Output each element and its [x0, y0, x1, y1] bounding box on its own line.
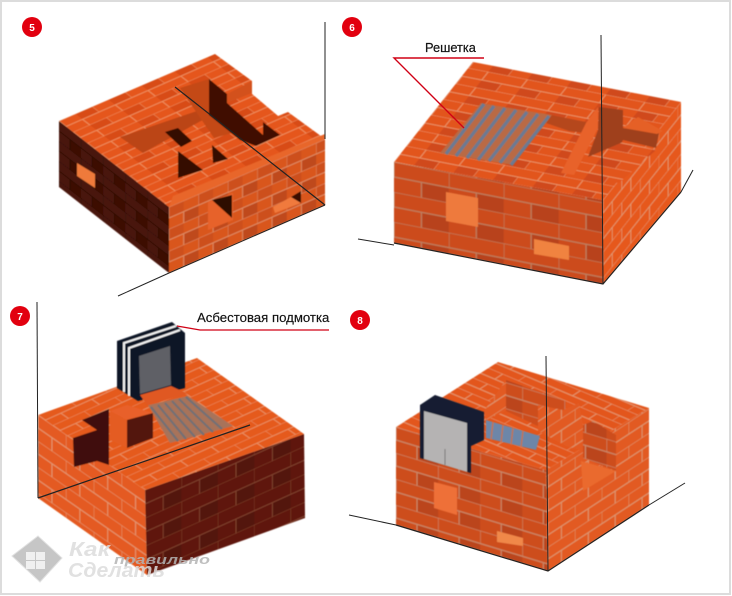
axis lines 6 [358, 35, 693, 284]
step badge 5: 5 [29, 23, 35, 34]
step badge 7: 7 [17, 312, 23, 323]
brick body 5 [59, 54, 325, 273]
watermark text [68, 539, 210, 582]
diagram 6: grate layer [342, 17, 693, 284]
step badge 7 [10, 306, 30, 326]
callout: asbestos wrap: Асбестовая подмотка [197, 310, 330, 325]
diagram 8: door closed layer [349, 310, 685, 571]
callout: asbestos wrap [177, 310, 330, 330]
axis lines 5 [118, 22, 325, 296]
watermark text: Сделать [68, 560, 165, 582]
watermark text: Как [69, 539, 111, 561]
step badge 6 [342, 17, 362, 37]
diagram 5: brick stove layer [22, 17, 325, 296]
step badge 8 [350, 310, 370, 330]
firebox door 8 [420, 395, 484, 473]
icon: house diamond [12, 536, 62, 582]
grate 7 [151, 397, 222, 441]
firebox door with asbestos wrap 7 [117, 322, 188, 405]
callout: grate [394, 40, 484, 128]
watermark logo [12, 536, 210, 582]
callout: grate: Решетка [425, 40, 477, 55]
grate 6 [440, 103, 552, 165]
watermark text: правильно [114, 552, 210, 567]
axis lines 7 [37, 302, 250, 498]
brick body 8 [396, 362, 649, 571]
step badge 6: 6 [349, 23, 355, 34]
brick body 7 [38, 358, 305, 575]
step badge 5 [22, 17, 42, 37]
step badge 8: 8 [357, 316, 363, 327]
grate 8 [486, 420, 540, 450]
brick body 6 [394, 62, 681, 284]
diagram 7: asbestos wrap layer [10, 302, 330, 575]
axis lines 8 [349, 356, 685, 571]
